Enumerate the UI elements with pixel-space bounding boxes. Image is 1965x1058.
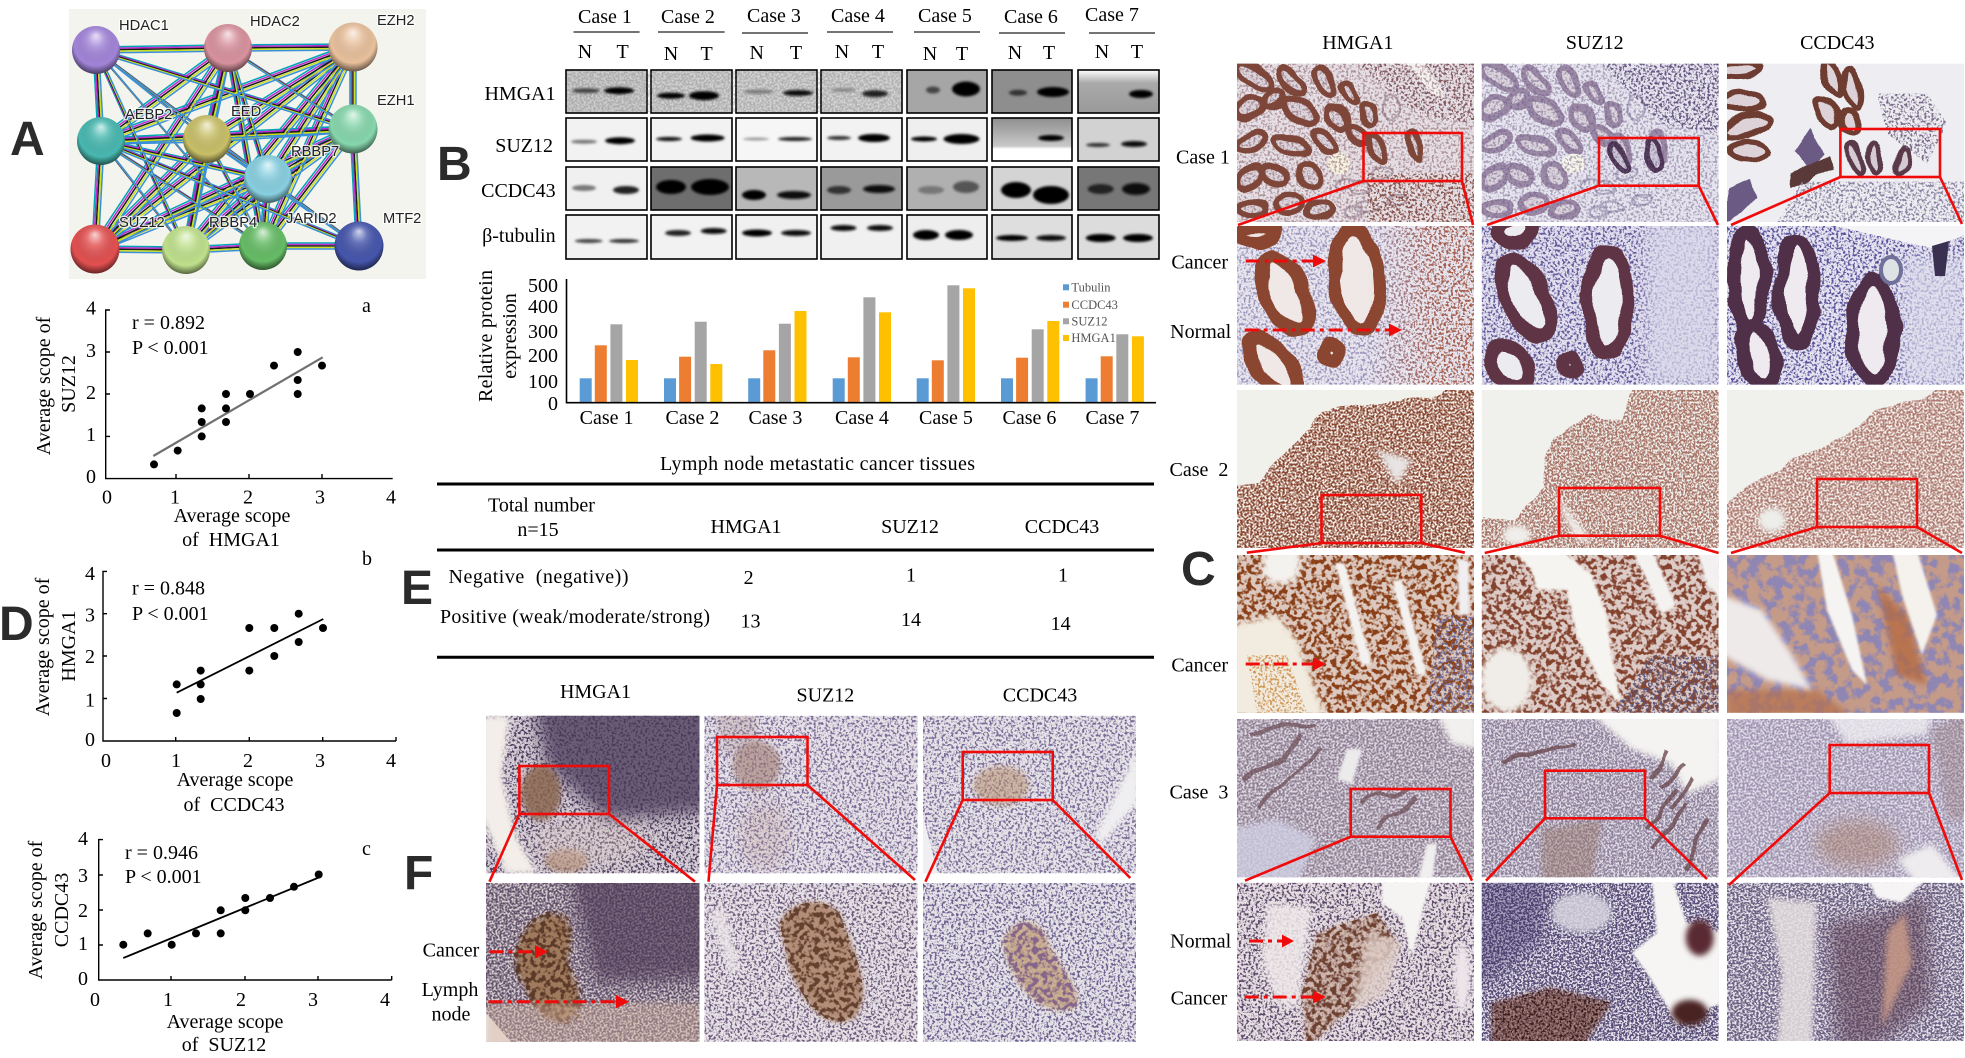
panel label D: D [0,598,34,651]
panel C: tumour tissue images [1217,57,1965,1048]
panel E: lymph node metastatic cancer table: 14 [901,609,921,631]
image: case 3 CCDC43 low magnification [1727,719,1964,878]
legend: Tubulin [1071,280,1111,294]
labels: cancer and lymph node [422,940,480,1026]
panel C column titles [1322,32,1875,54]
arrow: cancer [490,945,548,958]
y axis title: Relative protein [475,270,497,402]
node labels: JARID2 [286,211,337,227]
case header labels for western blots: Case 1 [578,6,632,28]
scatter plot c: CCDC43 vs SUZ12: Average scope [167,1011,284,1033]
scatter plot a: SUZ12 vs HMGA1: 0 [102,487,112,509]
panel C side labels: Case 3 [1170,781,1228,803]
labels: cancer and lymph node: Cancer [423,940,480,962]
node labels: RBBP7 [291,144,339,160]
case header labels for western blots: N [1095,41,1109,63]
case header labels for western blots: T [616,41,629,63]
node: AEBP2 [77,117,125,165]
scatter plot c: CCDC43 vs SUZ12: 1 [78,933,88,955]
western blot: SUZ12 row [566,118,1159,161]
node labels [119,13,421,231]
scatter plot a: SUZ12 vs HMGA1: 4 [386,487,396,509]
y axis title: expression [499,293,521,379]
image: case 1 SUZ12 high magnification [1482,226,1719,385]
panel label E: E [401,562,433,615]
scatter plot c: CCDC43 vs SUZ12: 0 [90,989,100,1011]
case header labels for western blots: Case 2 [661,6,715,28]
panel C side labels: Cancer [1171,252,1228,274]
case labels: Case 1 [580,407,634,429]
panel C column titles: CCDC43 [1800,32,1875,54]
red zoom boxes and connectors [490,737,1130,882]
image: case 3 HMGA1 low magnification [1237,719,1474,878]
image: case 2 CCDC43 high magnification [1727,555,1964,713]
panel A: protein interaction network [69,9,426,279]
panel C side labels: Normal [1170,321,1232,343]
western blot row labels [481,83,556,247]
node labels: EZH1 [377,93,415,109]
node labels: SUZ12 [119,215,165,231]
image: CCDC43 high magnification [923,883,1136,1042]
scatter plot c: CCDC43 vs SUZ12: 2 [236,989,246,1011]
node: EED [183,115,231,163]
scatter plot a: SUZ12 vs HMGA1: 0 [86,466,96,488]
image: case 1 CCDC43 high magnification [1727,226,1964,385]
scatter plot a: SUZ12 vs HMGA1: Average scope [174,505,291,527]
scatter plot c: CCDC43 vs SUZ12: P < 0.001 [125,866,202,888]
case header labels for western blots: Case 3 [747,5,801,27]
scatter plot b: HMGA1 vs CCDC43: 2 [85,646,95,668]
case labels: Case 6 [1003,407,1056,429]
panel E: lymph node metastatic cancer table: 2 [744,567,754,589]
legend [1063,280,1118,345]
scatter plot c: CCDC43 vs SUZ12: c [362,838,371,860]
red zoom boxes and connectors: case 3 [1245,745,1962,885]
panel E: lymph node metastatic cancer table: SUZ12 [881,516,939,538]
scatter plot b: HMGA1 vs CCDC43: Average scope of [32,577,54,716]
panel C side labels: Case 2 [1170,459,1228,481]
image: case 2 CCDC43 low magnification [1727,390,1964,548]
scatter plot c: CCDC43 vs SUZ12: of SUZ12 [182,1034,266,1056]
node labels: AEBP2 [125,107,172,123]
arrow: case 2 cancer [1246,658,1326,670]
panel F column titles: SUZ12 [797,685,854,707]
case labels: Case 3 [749,407,802,429]
western blot row labels: HMGA1 [484,83,556,105]
panel F: lymph node tissue images [422,696,1139,1048]
node: EZH2 [328,22,378,72]
scatter plot a: SUZ12 vs HMGA1: 1 [86,424,96,446]
image: case 2 SUZ12 low magnification [1482,390,1719,548]
tick labels: 500 [528,275,558,297]
node labels: HDAC1 [119,18,169,34]
panel E: lymph node metastatic cancer table [437,453,1154,657]
arrow: case 3 normal [1249,934,1294,948]
scatter plot c: CCDC43 vs SUZ12: 1 [163,989,173,1011]
case header labels for western blots: T [956,43,968,65]
case header labels for western blots: N [749,42,764,64]
node labels: HDAC2 [250,14,300,30]
image: case 1 CCDC43 low magnification [1727,64,1964,222]
case labels: Case 4 [835,407,889,429]
network edges [92,44,362,253]
panel E: lymph node metastatic cancer table: Negative (negative)) [448,566,628,588]
panel E: lymph node metastatic cancer table: Total number [488,495,595,517]
scatter plot b: HMGA1 vs CCDC43: 0 [85,729,95,751]
panel E: lymph node metastatic cancer table: n=15 [517,519,559,541]
node: HDAC2 [204,24,252,72]
red zoom boxes and connectors: case 2 [1247,479,1962,553]
scatter plot a: SUZ12 vs HMGA1: SUZ12 [58,355,80,413]
case header labels for western blots: Case 7 [1085,4,1139,26]
scatter plot a: SUZ12 vs HMGA1 [33,295,396,551]
image: SUZ12 low magnification [704,716,918,874]
case header labels for western blots: T [790,42,802,64]
arrow: lymph node [488,995,629,1008]
node: SUZ12 [70,224,120,274]
image: case 3 HMGA1 high magnification [1237,882,1474,1041]
image: case 1 SUZ12 low magnification [1482,64,1719,222]
legend: SUZ12 [1071,314,1108,328]
panel label B: B [437,138,472,191]
image: HMGA1 high magnification [486,883,700,1042]
scatter plot b: HMGA1 vs CCDC43: 0 [101,750,111,772]
image: case 1 HMGA1 high magnification [1237,226,1474,385]
western blot row labels: CCDC43 [481,180,556,202]
panel C column titles: HMGA1 [1322,32,1393,54]
scatter plot c: CCDC43 vs SUZ12: r = 0.946 [125,842,198,864]
tick labels: 300 [528,321,558,343]
image: case 2 SUZ12 high magnification [1482,555,1719,713]
tick labels [528,275,558,415]
y axis title [475,270,521,402]
scatter plot a: SUZ12 vs HMGA1: 3 [315,487,325,509]
case labels: Case 7 [1086,407,1139,429]
case header labels for western blots: T [700,43,713,65]
scatter plot a: SUZ12 vs HMGA1: P < 0.001 [132,337,209,359]
western blot row labels: β-tubulin [482,225,556,247]
scatter plot b: HMGA1 vs CCDC43 [32,548,396,816]
legend: CCDC43 [1071,298,1118,312]
scatter plot a: SUZ12 vs HMGA1: Average scope of [33,316,55,455]
scatter plot b: HMGA1 vs CCDC43: r = 0.848 [132,578,205,600]
scatter plot c: CCDC43 vs SUZ12: 2 [78,900,88,922]
scatter plot a: SUZ12 vs HMGA1: 3 [86,340,96,362]
node: EZH1 [328,104,378,154]
node labels: EZH2 [377,13,415,29]
panel E: lymph node metastatic cancer table: Positive (weak/moderate/strong) [440,606,710,628]
scatter plot a: SUZ12 vs HMGA1: 4 [86,298,96,320]
scatter plot b: HMGA1 vs CCDC43: 1 [85,690,95,712]
panel C side labels [1170,147,1232,1009]
arrow: case 1 cancer [1246,254,1326,268]
case header labels for western blots: N [835,41,849,63]
image: case 3 CCDC43 high magnification [1727,882,1964,1041]
western blot: beta-tubulin row [566,215,1159,259]
western blot: HMGA1 row [566,70,1159,113]
scatter plot b: HMGA1 vs CCDC43: 1 [171,750,181,772]
node: RBBP7 [244,155,292,203]
scatter plot c: CCDC43 vs SUZ12 [25,828,392,1056]
case header labels for western blots: T [1043,42,1055,64]
case labels [580,407,1139,429]
panel label A: A [10,113,45,166]
case header labels for western blots: Case 4 [831,5,885,27]
scatter plot c: CCDC43 vs SUZ12: CCDC43 [51,873,73,947]
case header labels for western blots: T [1131,41,1143,63]
bar chart: relative protein expression [475,270,1156,429]
red zoom boxes and connectors: case 1 [1238,129,1962,225]
panel E: lymph node metastatic cancer table: 14 [1051,613,1071,635]
node labels: MTF2 [383,211,421,227]
case labels: Case 5 [919,407,973,429]
tick labels: 0 [548,393,558,415]
scatter plot a: SUZ12 vs HMGA1: 1 [170,487,180,509]
case header labels for western blots: N [664,43,678,65]
scatter plot c: CCDC43 vs SUZ12: 3 [308,989,318,1011]
scatter plot b: HMGA1 vs CCDC43: P < 0.001 [132,603,209,625]
case header labels for western blots: N [923,43,937,65]
scatter plot b: HMGA1 vs CCDC43: HMGA1 [58,610,80,682]
scatter plot b: HMGA1 vs CCDC43: 4 [386,750,396,772]
scatter plot b: HMGA1 vs CCDC43: of CCDC43 [183,794,285,816]
image: case 3 SUZ12 high magnification [1482,882,1719,1041]
panel E: lymph node metastatic cancer table: Lymph node metastatic cancer tissues [660,453,975,475]
panel C side labels: Cancer [1171,655,1228,677]
tick labels: 100 [528,371,558,393]
panel E: lymph node metastatic cancer table: 13 [740,611,760,633]
legend: HMGA1 [1071,331,1116,345]
arrow: case 1 normal [1245,324,1402,336]
panel E: lymph node metastatic cancer table: 1 [906,565,916,587]
case header labels for western blots: Case 6 [1004,6,1058,28]
scatter plot b: HMGA1 vs CCDC43: Average scope [177,769,294,791]
node: lime protein [162,226,210,274]
panel F column titles: CCDC43 [1003,685,1077,707]
western blot: CCDC43 row [566,167,1159,210]
scatter plot a: SUZ12 vs HMGA1: 2 [243,487,253,509]
labels: cancer and lymph node: Lymph [422,979,478,1001]
image: HMGA1 low magnification [486,716,700,874]
scatter plot a: SUZ12 vs HMGA1: of HMGA1 [182,529,280,551]
panel E: lymph node metastatic cancer table: HMGA1 [710,516,782,538]
case header labels for western blots [574,4,1155,65]
scatter plot a: SUZ12 vs HMGA1: r = 0.892 [132,312,205,334]
bars [580,285,1144,403]
panel C side labels: Cancer [1171,987,1228,1009]
panel C side labels: Case 1 [1176,147,1230,169]
scatter plot b: HMGA1 vs CCDC43: 4 [85,563,95,585]
node: MTF2 [334,222,384,270]
image: CCDC43 low magnification [923,716,1136,874]
scatter plot b: HMGA1 vs CCDC43: 3 [315,750,325,772]
tick labels: 200 [528,345,558,367]
axes [566,279,1156,403]
panel C side labels: Normal [1170,931,1232,953]
panel C column titles: SUZ12 [1566,32,1624,54]
case header labels for western blots: N [1008,42,1022,64]
case header labels for western blots: Case 5 [918,5,972,27]
scatter plot b: HMGA1 vs CCDC43: b [362,548,372,570]
node: RBBP4 [239,222,287,270]
scatter plot c: CCDC43 vs SUZ12: 4 [380,989,390,1011]
image: case 3 SUZ12 low magnification [1482,719,1719,878]
scatter plot a: SUZ12 vs HMGA1: 2 [86,382,96,404]
panel F column titles: HMGA1 [560,681,631,703]
scatter plot c: CCDC43 vs SUZ12: 0 [78,968,88,990]
case header labels for western blots: N [578,41,592,63]
labels: cancer and lymph node: node [432,1004,471,1026]
image: case 2 HMGA1 high magnification [1237,555,1474,713]
image: case 2 HMGA1 low magnification [1237,390,1474,548]
node: HDAC1 [72,26,120,74]
arrow: case 3 cancer [1245,990,1326,1004]
scatter plot c: CCDC43 vs SUZ12: 4 [78,828,88,850]
scatter plot b: HMGA1 vs CCDC43: 2 [243,750,253,772]
panel F column titles [560,681,1077,707]
node labels: RBBP4 [209,215,257,231]
case labels: Case 2 [666,407,719,429]
image: case 1 HMGA1 low magnification [1237,64,1474,222]
panel label F: F [404,847,433,900]
network background [69,9,426,279]
tick labels: 400 [528,296,558,318]
node labels: EED [231,104,261,120]
panel label C: C [1181,543,1216,596]
case header labels for western blots: T [872,41,884,63]
panel E: lymph node metastatic cancer table: CCDC43 [1025,516,1099,538]
scatter plot a: SUZ12 vs HMGA1: a [362,295,371,317]
image: SUZ12 high magnification [704,883,918,1042]
western blot row labels: SUZ12 [495,135,553,157]
scatter plot c: CCDC43 vs SUZ12: Average scope of [25,840,47,979]
scatter plot b: HMGA1 vs CCDC43: 3 [85,604,95,626]
panel E: lymph node metastatic cancer table: 1 [1058,565,1068,587]
scatter plot c: CCDC43 vs SUZ12: 3 [78,865,88,887]
